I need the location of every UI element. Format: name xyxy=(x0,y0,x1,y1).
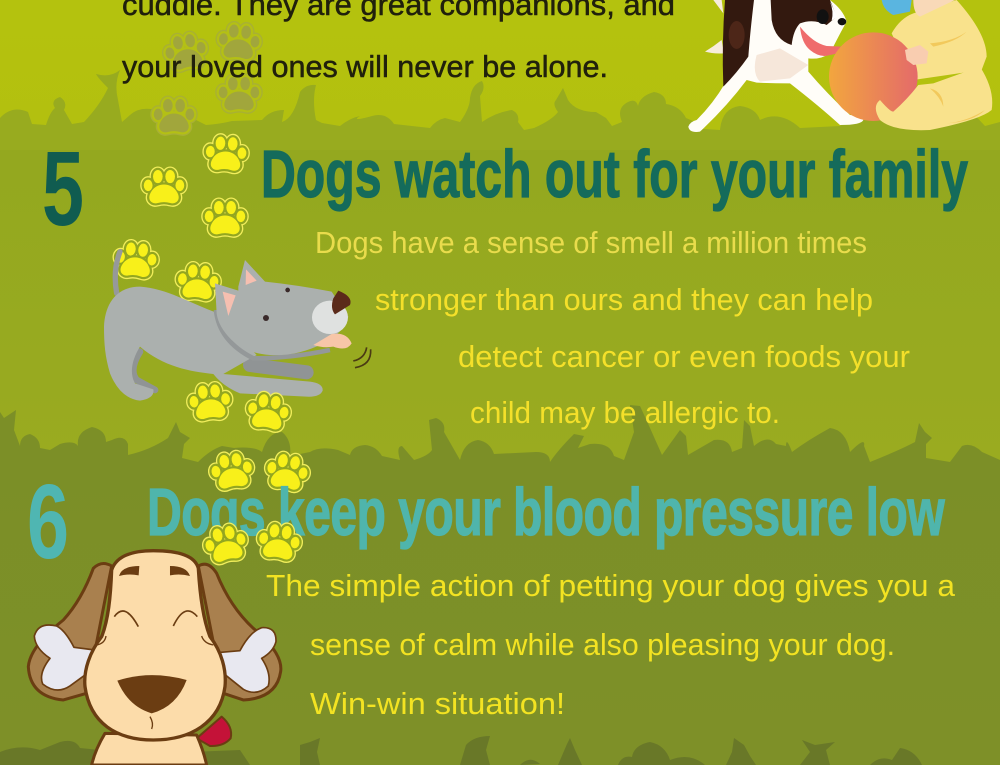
nose xyxy=(332,291,351,314)
section 5 body text xyxy=(315,225,910,430)
section 5 body text: Dogs have a sense of smell a million times xyxy=(315,225,867,260)
paw prints: yellow trail upper xyxy=(114,136,247,300)
dog body and legs xyxy=(688,0,863,132)
silhouettes: middle dog row xyxy=(0,405,1000,480)
background: top band xyxy=(0,0,1000,140)
silhouettes: bottom dog row xyxy=(0,736,922,765)
right ear xyxy=(198,564,281,700)
background: section 6 band xyxy=(0,466,1000,765)
top text block: your loved ones will never be alone. xyxy=(122,49,608,84)
section 6 body text: Win-win situation! xyxy=(310,686,565,721)
background: section 5 band xyxy=(0,130,1000,470)
top text block xyxy=(122,0,675,84)
tongue xyxy=(313,334,352,349)
dog dark patches xyxy=(723,0,754,87)
paw prints: faded top trail xyxy=(154,23,261,132)
cheek marks xyxy=(97,636,213,645)
section 5 number: 5 xyxy=(42,130,84,248)
right bone xyxy=(217,628,276,692)
closed eyes xyxy=(114,611,197,627)
paw prints: yellow trail lower xyxy=(188,383,310,492)
section 6 number: 6 xyxy=(27,463,69,581)
illustration: smiling brown dog with bone xyxy=(28,551,281,765)
red collar tag xyxy=(197,717,231,746)
section 6 body text: sense of calm while also pleasing your dog. xyxy=(310,627,895,662)
motion marks xyxy=(353,347,371,368)
muzzle xyxy=(312,301,348,334)
illustration: dog playing with baby and ball xyxy=(688,0,992,132)
section 6 body text: The simple action of petting your dog gives you a xyxy=(266,568,956,603)
dog tongue and mouth xyxy=(800,27,843,56)
tail xyxy=(115,252,120,293)
paw prints: trail over heading xyxy=(202,522,302,564)
eyes xyxy=(263,315,269,321)
baby legs xyxy=(876,67,992,130)
neck and chest xyxy=(92,733,207,765)
baby torso xyxy=(892,0,987,80)
dog tail xyxy=(705,0,724,53)
section 5 body text: detect cancer or even foods your xyxy=(458,339,910,374)
mouth xyxy=(117,675,187,713)
silhouettes: top dog row xyxy=(0,70,1000,150)
left bone xyxy=(34,625,95,690)
section 5 body text: child may be allergic to. xyxy=(470,395,780,430)
dog face xyxy=(830,2,837,21)
left ear xyxy=(28,563,112,700)
eyebrows xyxy=(119,566,190,576)
section 5 body text: stronger than ours and they can help xyxy=(375,282,873,317)
ball xyxy=(829,32,918,121)
section 5 heading: Dogs watch out for your family xyxy=(261,137,968,212)
body xyxy=(104,287,323,401)
section 6 body text xyxy=(266,568,956,721)
ears and head xyxy=(215,260,348,355)
far legs xyxy=(133,352,155,390)
head xyxy=(85,551,225,740)
collar xyxy=(216,310,330,358)
section 6 heading: Dogs keep your blood pressure low xyxy=(147,475,945,550)
illustration: grey dog xyxy=(104,252,371,401)
